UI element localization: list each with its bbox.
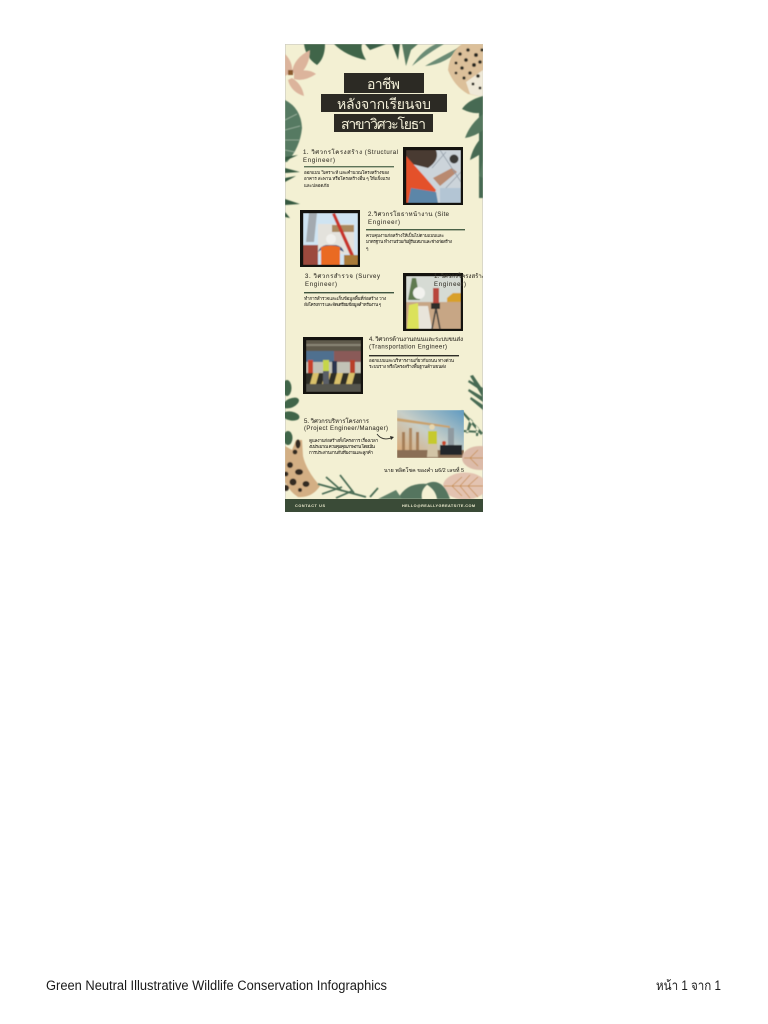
giraffe: bottom left — [283, 440, 320, 497]
section 4 text: 4. วิศวกรด้านงานถนนและระบบขนส่ง — [369, 336, 463, 343]
section 4 text: (Transportation Engineer) — [369, 344, 447, 350]
foliage: right side leaf — [462, 96, 483, 198]
section 4 text: ระบบราง หรือโครงสร้างพื้นฐานด้านขนส่ง — [369, 363, 446, 370]
section 4 text: ออกแบบและบริหารงานเกี่ยวกับถนน ทางด่วน — [369, 357, 454, 363]
document footer: file name: Green Neutral Illustrative Wildlife Conservation Infographics — [46, 978, 387, 993]
section 2 text: ๆ — [366, 246, 369, 251]
title line 3: สาขาวิศวะโยธา — [341, 116, 426, 132]
pink leaves: bottom right — [442, 446, 483, 499]
flower: top left — [285, 50, 316, 96]
section 1 text — [303, 148, 398, 188]
section 5 text: 5. วิศวกรบริหารโครงการ — [304, 417, 370, 425]
section 3 text: ทำการสำรวจและเก็บข้อมูลพื้นที่ก่อสร้าง วาง — [304, 294, 386, 302]
leopard: top right — [448, 44, 484, 97]
footer bar: HELLO@REALLYGREATSITE.COM — [402, 504, 475, 508]
photo 2: site engineer in orange vest — [300, 210, 360, 267]
section 2 text: 2.วิศวกรโยธาหน้างาน (Site — [368, 210, 450, 218]
section 5 text: (Project Engineer/Manager) — [304, 426, 388, 432]
section 1 text: Engineer) — [303, 158, 335, 164]
section 2 text: มาตรฐาน ทำงานร่วมกับผู้รับเหมาและช่างก่อสร้าง — [366, 238, 452, 245]
section 3 text: Engineer) — [305, 282, 337, 288]
foliage: left lower leaves — [285, 379, 300, 446]
section 3 text — [304, 273, 394, 308]
section 5 text: ดูแลงานก่อสร้างทั้งโครงการ เรื่องเวลา — [309, 437, 379, 444]
title line 2: หลังจากเรียนจบ — [337, 96, 431, 112]
infographic poster — [281, 44, 498, 512]
section 2 text: ควบคุมงานก่อสร้างให้เป็นไปตามแบบและ — [366, 231, 444, 239]
foliage: right middle fern — [461, 375, 483, 436]
title block — [321, 73, 447, 132]
section 1 text: อาคาร สะพาน หรือโครงสร้างอื่น ๆ ให้แข็งแรง — [304, 174, 390, 181]
photo 3: surveyor with instrument — [403, 273, 463, 331]
photo 1: engineer with plans — [403, 147, 463, 205]
credit line: นาย พลิตโชค ของคำ ม6/2 เลขที่ 5 — [384, 467, 464, 474]
overflowing duplicate heading: 1. วิศวกรโครงสร้าง — [434, 272, 485, 280]
section 1 text: และปลอดภัย — [304, 183, 329, 188]
section 1 text: 1. วิศวกรโครงสร้าง (Structural — [303, 148, 398, 156]
footer bar: CONTACT US — [295, 504, 325, 508]
section 3 text: ผังโครงการ และจัดเตรียมข้อมูลสำหรับงาน ๆ — [304, 301, 382, 308]
section 2 text: Engineer) — [368, 220, 400, 226]
footer bar — [285, 499, 483, 512]
foliage: bottom leaves — [318, 475, 450, 499]
section 3 text: 3. วิศวกรสำรวจ (Survey — [305, 273, 380, 280]
overflowing duplicate heading: Engineer) — [434, 282, 466, 288]
section 5 text — [304, 417, 388, 456]
foliage: left side leaf — [285, 100, 302, 218]
document footer: page number: หน้า 1 จาก 1 — [656, 978, 721, 993]
poster background — [285, 44, 483, 512]
section 5 text: งบประมาณ ควบคุมคุณภาพงาน โดยเน้น — [309, 443, 375, 450]
section 2 text — [366, 210, 465, 251]
section 4 text — [369, 336, 463, 370]
photo 4: road workers — [303, 337, 363, 394]
arrow to photo 5 — [377, 434, 394, 440]
section 5 text: การประสานงานกับทีมงานและลูกค้า — [309, 450, 373, 456]
title line 1: อาชีพ — [367, 76, 400, 92]
overflowing duplicate heading — [434, 272, 485, 288]
foliage: top leaves — [304, 44, 462, 66]
photo 5: engineer at construction site — [397, 410, 464, 458]
section 1 text: ออกแบบ วิเคราะห์ และคำนวณโครงสร้างของ — [304, 169, 389, 175]
